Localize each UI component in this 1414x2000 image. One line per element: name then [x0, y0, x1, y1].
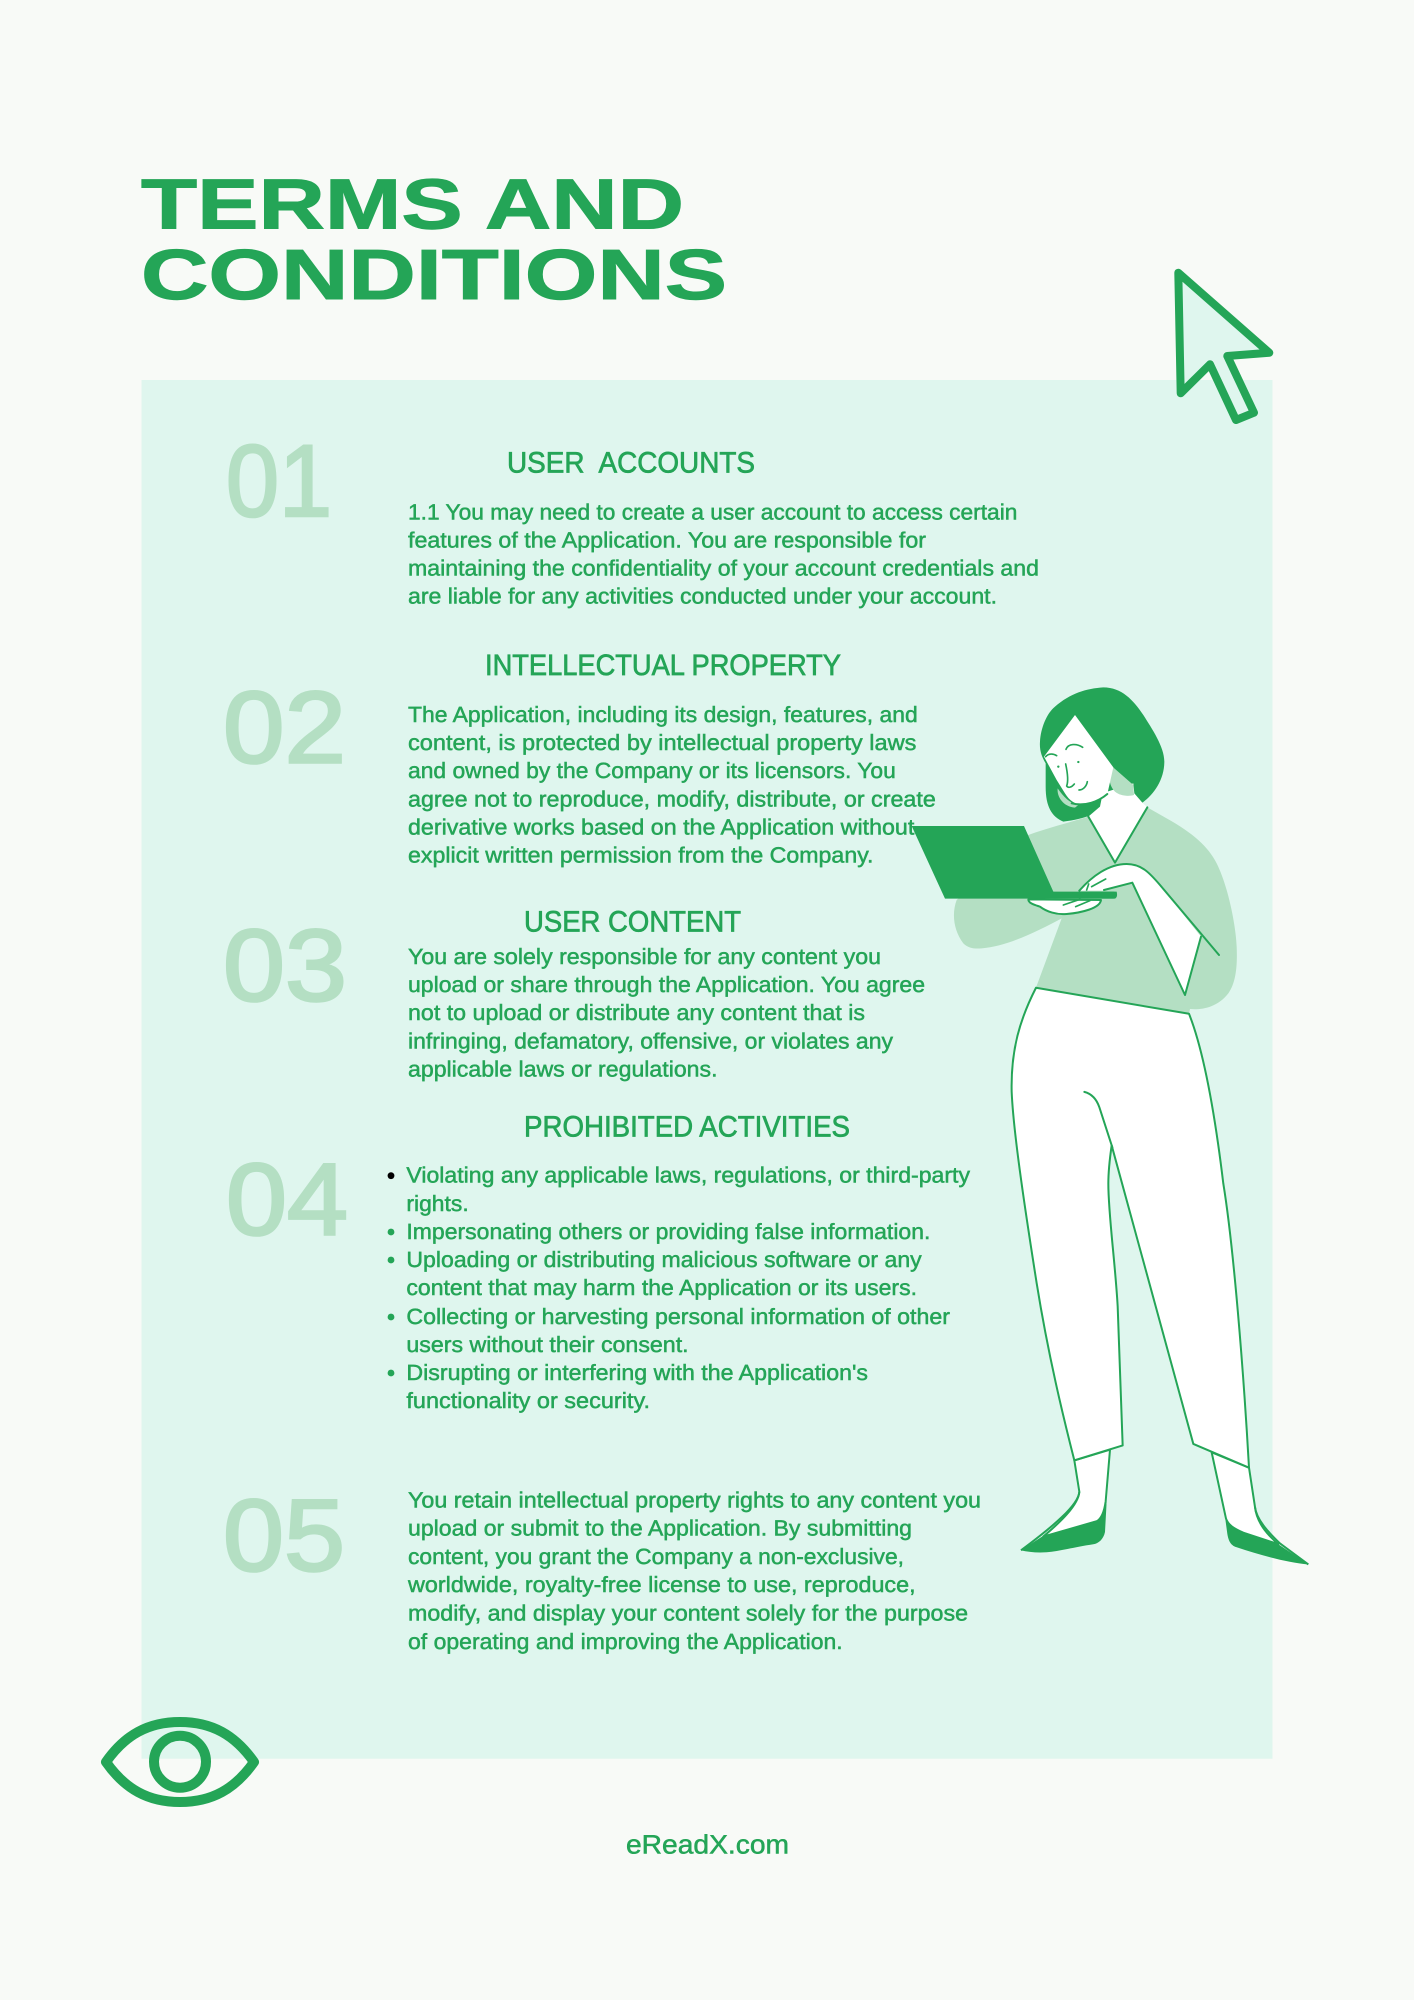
sweater — [954, 807, 1237, 1014]
section 02: intellectual property — [223, 649, 936, 868]
bullet list: content that may harm the Application or its users. — [406, 1275, 917, 1300]
text block: user content: not to upload or distribute any content that is — [408, 1000, 865, 1025]
number 04: 04 — [226, 1142, 348, 1256]
text block: user accounts: 1.1 You may need to create a user account to access certain — [408, 499, 1017, 524]
text block: content license: worldwide, royalty-free license to use, reproduce, — [407, 1572, 916, 1597]
text block: user content: upload or share through the Application. You agree — [408, 972, 925, 997]
bullet list: Violating any applicable laws, regulations, or third-party — [406, 1162, 970, 1187]
text block: intellectual property: content, is protected by intellectual property laws — [408, 730, 916, 755]
number 01: 01 — [226, 424, 332, 538]
bullet list: Collecting or harvesting personal information of other — [406, 1304, 950, 1329]
text block: user content: You are solely responsible for any content you — [408, 944, 881, 969]
text block: user accounts: are liable for any activities conducted under your account. — [408, 583, 997, 608]
text block: content license: of operating and improving the Application. — [408, 1629, 843, 1654]
bullet list: users without their consent. — [406, 1332, 689, 1357]
title: TERMS AND — [141, 166, 684, 244]
text block: user content: infringing, defamatory, offensive, or violates any — [408, 1028, 893, 1053]
text block: intellectual property: agree not to reproduce, modify, distribute, or create — [408, 786, 936, 811]
bullet list: Impersonating others or providing false information. — [406, 1219, 930, 1244]
text block: user accounts: features of the Application. You are responsible for — [408, 527, 926, 552]
icon: eye — [106, 1722, 254, 1802]
bullet list — [388, 1162, 970, 1413]
number 03: 03 — [223, 908, 347, 1022]
text block: user content: applicable laws or regulations. — [408, 1056, 718, 1082]
text block: content license: modify, and display your content solely for the purpose — [408, 1600, 968, 1626]
title — [141, 166, 727, 315]
panel: content background — [142, 380, 1272, 1759]
number 05: 05 — [223, 1478, 345, 1592]
head, arms and laptop — [912, 687, 1219, 995]
text block: content license: upload or submit to the Application. By submitting — [408, 1516, 912, 1541]
section 03: user content — [223, 906, 925, 1082]
bullet list: functionality or security. — [406, 1388, 650, 1413]
legs and shoes — [1012, 988, 1308, 1564]
footer: website: eReadX.com — [626, 1829, 789, 1859]
text block: intellectual property — [408, 702, 936, 868]
number 02: 02 — [223, 670, 346, 784]
text block: intellectual property: derivative works based on the Application without — [408, 815, 914, 840]
text block: intellectual property: The Application, including its design, features, and — [408, 702, 918, 727]
heading: intellectual property: INTELLECTUAL PROPERTY — [485, 649, 841, 682]
text block: content license — [407, 1488, 981, 1654]
text block: content license: You retain intellectual property rights to any content you — [408, 1488, 981, 1513]
text block: intellectual property: and owned by the Company or its licensors. You — [408, 758, 896, 783]
heading: user accounts: USER ACCOUNTS — [507, 447, 755, 480]
icon: mouse cursor — [1178, 273, 1269, 420]
heading: prohibited activities: PROHIBITED ACTIVITIES — [524, 1110, 850, 1144]
text block: user accounts — [408, 499, 1039, 608]
section 04: prohibited activities — [226, 1110, 970, 1413]
bullet list: Uploading or distributing malicious software or any — [406, 1247, 922, 1272]
heading: user content: USER CONTENT — [524, 906, 741, 939]
section 01: user accounts — [226, 424, 1039, 608]
illustration: woman with laptop — [912, 687, 1308, 1564]
text block: user accounts: maintaining the confidentiality of your account credentials and — [408, 555, 1039, 580]
title: CONDITIONS — [141, 236, 727, 315]
bullet list: Disrupting or interfering with the Application's — [406, 1360, 868, 1385]
section 05: content license — [223, 1478, 981, 1654]
text block: user content — [408, 944, 925, 1082]
text block: intellectual property: explicit written permission from the Company. — [408, 843, 874, 868]
text block: content license: content, you grant the Company a non-exclusive, — [408, 1544, 904, 1569]
bullet list: rights. — [406, 1191, 469, 1216]
